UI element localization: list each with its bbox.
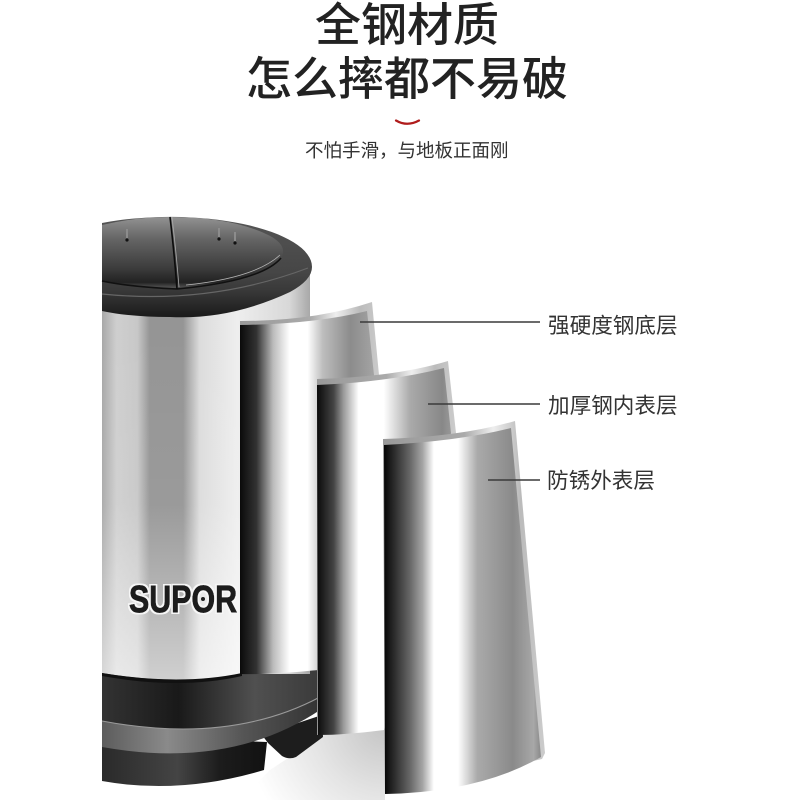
lower base xyxy=(102,735,267,786)
button divider xyxy=(170,217,177,289)
base upper band xyxy=(102,668,320,729)
lid xyxy=(102,217,312,317)
title line 1: 全钢材质 xyxy=(315,0,499,51)
steel layer: base layer xyxy=(240,302,381,674)
steel layer: outer layer xyxy=(383,421,545,794)
leader lines xyxy=(360,322,540,480)
base of the appliance xyxy=(102,668,323,786)
lid rim xyxy=(102,217,312,317)
label: base layer: 强硬度钢底层 xyxy=(548,313,678,338)
title line 2: 怎么摔都不易破 xyxy=(246,53,568,105)
subtitle: 不怕手滑，与地板正面刚 xyxy=(305,140,509,161)
base light band xyxy=(102,697,320,753)
label: outer layer: 防锈外表层 xyxy=(547,468,655,493)
lid buttons xyxy=(102,217,283,288)
foot xyxy=(262,715,323,758)
label: inner layer: 加厚钢内表层 xyxy=(548,393,678,418)
indicator marks xyxy=(125,228,237,245)
red accent curve xyxy=(396,120,419,124)
floor shadow xyxy=(240,725,385,800)
steel layer: inner layer xyxy=(317,361,456,735)
brand logo: SUPOR xyxy=(129,579,237,621)
stainless body xyxy=(102,270,310,683)
